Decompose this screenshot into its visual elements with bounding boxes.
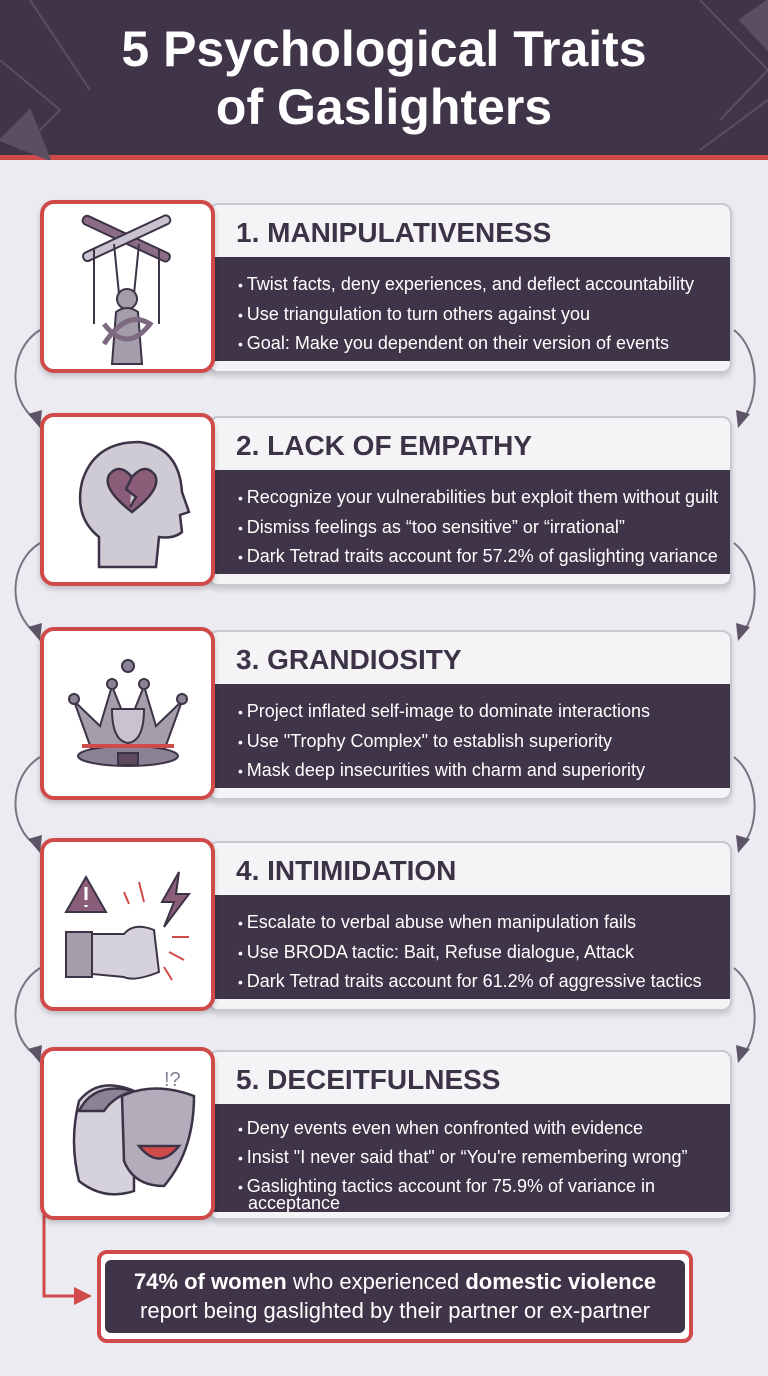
card 3 [38, 627, 734, 806]
callout: statistic: report being gaslighted by their partner or ex-partner [140, 1298, 650, 1323]
panel: manipulativeness [208, 203, 732, 373]
panel: lack of empathy: Dismiss feelings as “too sensitive” or “irrational” [247, 516, 625, 536]
panel: manipulativeness: Goal: Make you dependent on their version of events [247, 333, 669, 353]
icon: fist warning [40, 838, 215, 1011]
icon: puppet [40, 200, 215, 373]
panel: lack of empathy: Dark Tetrad traits account for 57.2% of gaslighting variance [247, 546, 718, 566]
panel: manipulativeness: Use triangulation to turn others against you [247, 304, 590, 324]
panel: manipulativeness: Twist facts, deny experiences, and deflect accountability [247, 274, 694, 294]
panel: deceitfulness: Deny events even when confronted with evidence [247, 1118, 643, 1138]
callout: statistic [97, 1250, 693, 1343]
icon: head broken heart [40, 413, 215, 586]
card 4 [38, 838, 734, 1017]
panel: deceitfulness: Insist "I never said that" or “You're remembering wrong” [247, 1147, 688, 1167]
panel: grandiosity: 3. GRANDIOSITY [236, 644, 462, 675]
panel: lack of empathy [208, 416, 732, 586]
icon: masks [40, 1047, 215, 1220]
panel: grandiosity: Mask deep insecurities with charm and superiority [247, 760, 645, 780]
panel: manipulativeness: 1. MANIPULATIVENESS [236, 217, 551, 248]
title: 5 Psychological Traits [121, 21, 647, 77]
title: of Gaslighters [216, 79, 552, 135]
panel: deceitfulness: Gaslighting tactics account for 75.9% of variance in [247, 1176, 655, 1196]
card 5 [38, 1047, 734, 1226]
panel: intimidation: 4. INTIMIDATION [236, 855, 456, 886]
card 1 [38, 200, 734, 379]
panel: intimidation [208, 841, 732, 1011]
card 2 [38, 413, 734, 592]
icon: masks: !? [164, 1069, 181, 1091]
header [0, 0, 768, 160]
panel: deceitfulness: acceptance [248, 1193, 340, 1213]
panel: intimidation: Dark Tetrad traits account for 61.2% of aggressive tactics [247, 971, 702, 991]
panel: deceitfulness: 5. DECEITFULNESS [236, 1064, 500, 1095]
panel: intimidation: Escalate to verbal abuse when manipulation fails [247, 912, 636, 932]
panel: grandiosity [208, 630, 732, 800]
panel: intimidation: Use BRODA tactic: Bait, Refuse dialogue, Attack [247, 942, 634, 962]
panel: deceitfulness [208, 1050, 732, 1220]
panel: grandiosity: Project inflated self-image to dominate interactions [247, 701, 650, 721]
callout: statistic: 74% of women who experienced domestic violence [134, 1269, 656, 1294]
panel: grandiosity: Use "Trophy Complex" to establish superiority [247, 730, 612, 750]
icon: crown trophy [40, 627, 215, 800]
panel: lack of empathy: Recognize your vulnerabilities but exploit them without guilt [247, 487, 718, 507]
panel: lack of empathy: 2. LACK OF EMPATHY [236, 430, 532, 461]
title [121, 21, 647, 135]
